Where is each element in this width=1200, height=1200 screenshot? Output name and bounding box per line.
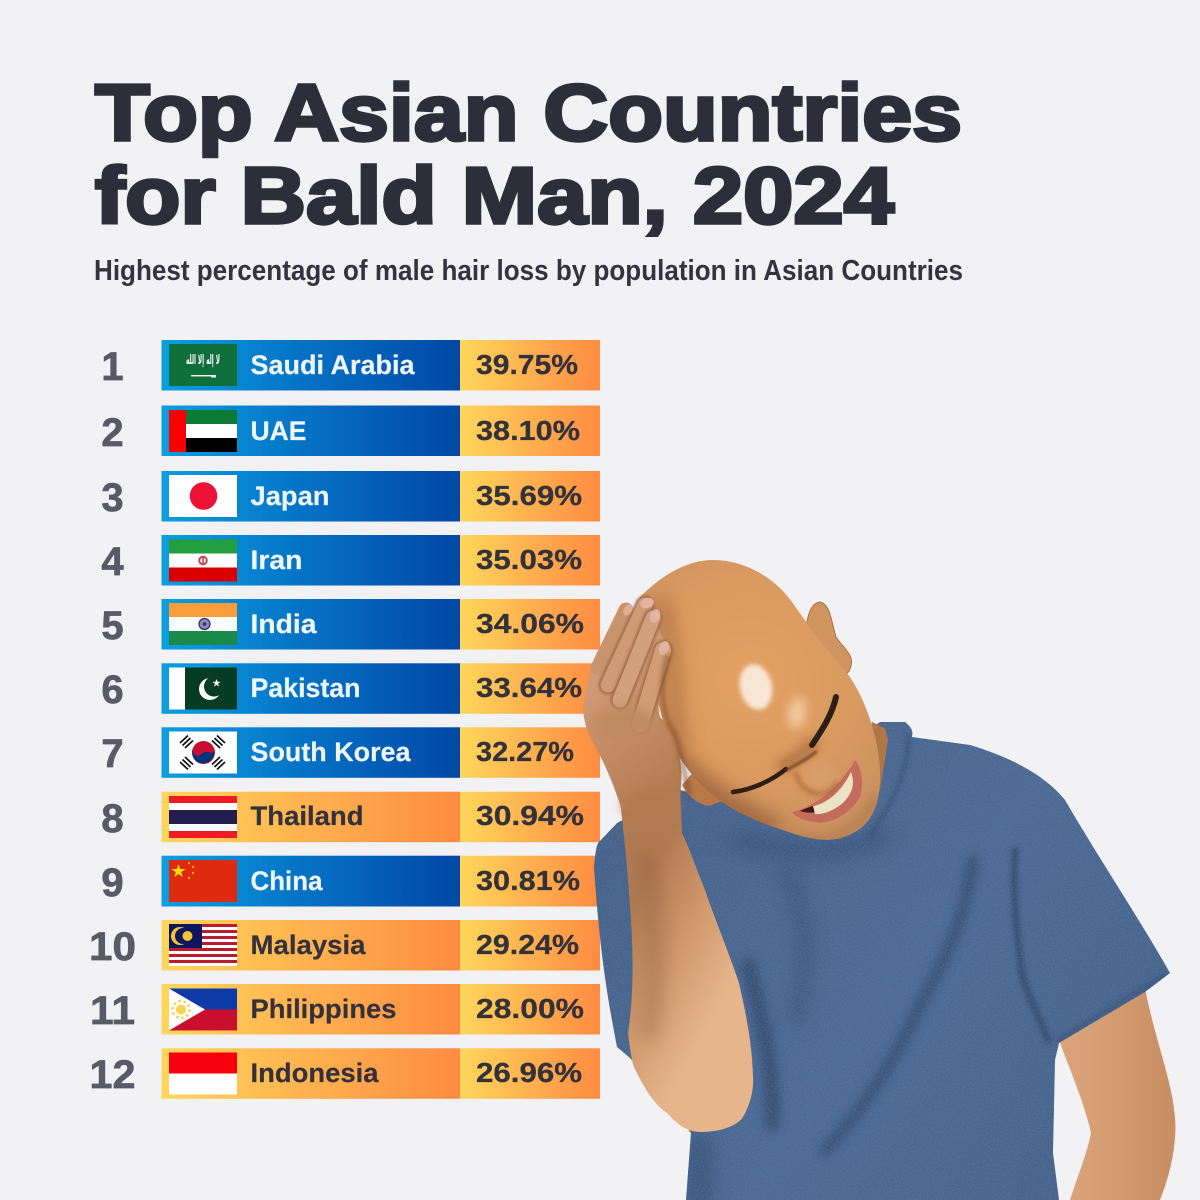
knuckle blend: [593, 707, 657, 743]
flag: South Korea: [169, 732, 237, 774]
row 3: Japan: [101, 471, 600, 522]
row 7: South Korea: 32.27%: [476, 736, 574, 767]
flag: Philippines: [169, 988, 237, 1030]
row 12: Indonesia: 26.96%: [476, 1057, 582, 1088]
row 2: UAE: [101, 406, 600, 456]
head highlight: [736, 661, 776, 713]
row 2: UAE: 2: [101, 411, 124, 455]
flag: Malaysia: [169, 924, 237, 966]
head: [640, 560, 880, 840]
row 11: Philippines: 11: [90, 989, 135, 1033]
title: for Bald Man, 2024: [95, 151, 895, 240]
row 10: Malaysia: [89, 920, 600, 970]
teeth: [813, 772, 853, 814]
row 7: South Korea: [101, 727, 600, 778]
row 1: Saudi Arabia: [101, 340, 600, 390]
row 6: Pakistan: Pakistan: [250, 673, 360, 703]
right ear: [806, 602, 852, 674]
nails: [621, 603, 635, 617]
illustration: bald man holding his head: [583, 560, 1180, 1200]
forearm: [619, 790, 753, 1132]
row 12: Indonesia: 12: [90, 1053, 136, 1097]
row 4: Iran: 4: [101, 540, 124, 584]
row 3: Japan: 35.69%: [476, 480, 582, 511]
face shading: [660, 600, 878, 850]
row 7: South Korea: South Korea: [250, 737, 411, 767]
flag: China: [169, 860, 237, 902]
row 7: South Korea: 7: [101, 732, 124, 776]
flag: Saudi Arabia: [169, 344, 237, 386]
row 2: UAE: 38.10%: [476, 415, 580, 446]
right arm: [1059, 988, 1175, 1200]
row 9: China: 9: [101, 861, 124, 905]
row 3: Japan: Japan: [250, 481, 330, 511]
flag: Thailand: [169, 796, 237, 838]
left ear: [682, 770, 725, 806]
row 5: India: India: [250, 609, 318, 639]
fingers: [598, 605, 663, 725]
hand-head shadow: [662, 655, 690, 795]
row 2: UAE: UAE: [250, 416, 306, 446]
t-shirt: [594, 722, 1170, 1200]
mouth: [792, 760, 862, 823]
row 4: Iran: [101, 535, 600, 586]
flag: India: [169, 603, 237, 645]
row 9: China: [101, 856, 600, 906]
row 1: Saudi Arabia: 39.75%: [476, 349, 578, 380]
row 12: Indonesia: [90, 1048, 600, 1099]
forehead highlight: [785, 696, 809, 730]
mouth interior: [800, 805, 818, 813]
row 11: Philippines: [90, 984, 600, 1034]
row 12: Indonesia: Indonesia: [250, 1058, 379, 1088]
shirt folds: [700, 735, 1165, 1200]
row 10: Malaysia: 10: [89, 925, 136, 969]
hand: [583, 596, 681, 810]
flag: Indonesia: [169, 1052, 237, 1094]
subtitle: Highest percentage of male hair loss by population in Asian Countries: [94, 255, 963, 287]
wrist blend: [622, 789, 678, 821]
row 6: Pakistan: [101, 663, 600, 714]
row 8: Thailand: 8: [101, 797, 124, 841]
eyebrows and eyes: [733, 697, 836, 792]
row 4: Iran: 35.03%: [476, 544, 582, 575]
row 9: China: China: [250, 866, 323, 896]
flag: Saudi Arabia: لا إله إلا الله: [186, 353, 220, 368]
flag: UAE: [169, 410, 237, 452]
row 11: Philippines: 28.00%: [476, 993, 584, 1024]
row 8: Thailand: 30.94%: [476, 800, 584, 831]
row 4: Iran: Iran: [250, 545, 302, 575]
row 10: Malaysia: 29.24%: [476, 929, 579, 960]
row 5: India: 5: [101, 604, 124, 648]
flag: Iran: [169, 540, 237, 582]
row 1: Saudi Arabia: 1: [101, 345, 124, 389]
row 8: Thailand: [101, 792, 600, 842]
row 11: Philippines: Philippines: [250, 994, 396, 1024]
row 5: India: 34.06%: [476, 608, 584, 639]
row 9: China: 30.81%: [476, 865, 580, 896]
nose: [795, 772, 838, 794]
row 3: Japan: 3: [101, 476, 124, 520]
flag: Pakistan: [169, 668, 237, 710]
row 1: Saudi Arabia: Saudi Arabia: [250, 350, 415, 380]
row 8: Thailand: Thailand: [250, 801, 364, 831]
arm hair shading: [645, 850, 655, 1040]
title: Top Asian Countries: [95, 68, 962, 157]
shirt fabric texture: [590, 720, 1180, 1200]
neck: [860, 722, 888, 790]
title: [95, 68, 962, 240]
row 6: Pakistan: 6: [101, 668, 124, 712]
flag: Japan: [169, 475, 237, 517]
row 5: India: [101, 599, 600, 650]
row 6: Pakistan: 33.64%: [476, 672, 582, 703]
ranking table: [89, 340, 600, 1099]
row 10: Malaysia: Malaysia: [250, 930, 367, 960]
